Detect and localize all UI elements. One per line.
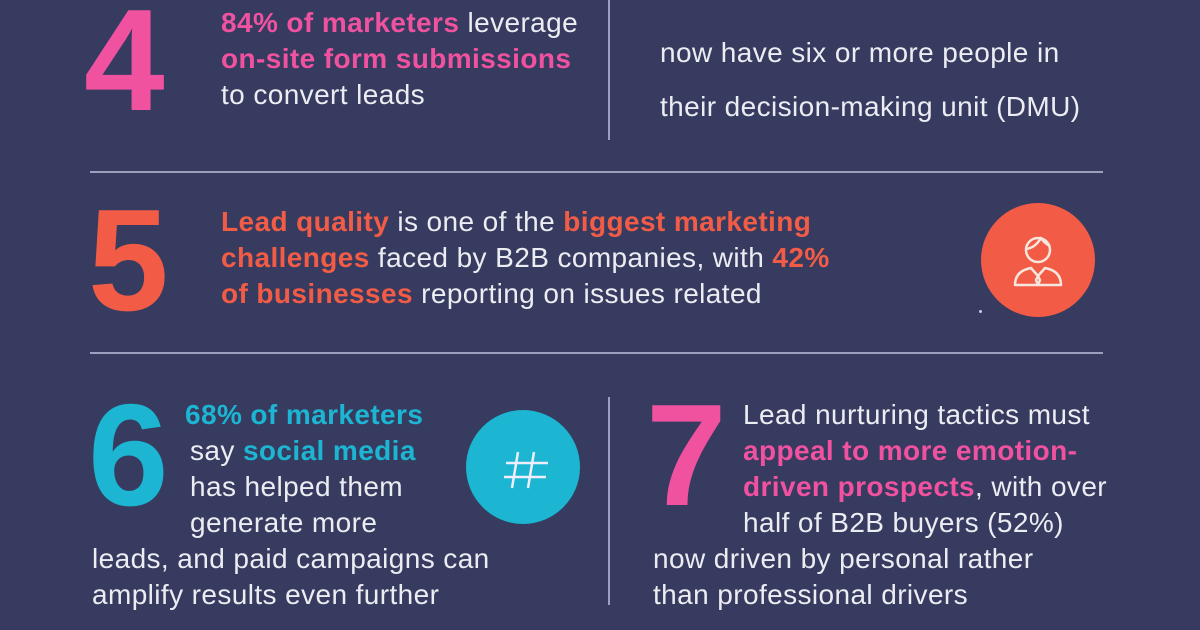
- text block 5: of businesses reporting on issues related: [221, 278, 762, 309]
- text block 7: Lead nurturing tactics must: [743, 399, 1090, 430]
- text block 6: amplify results even further: [92, 579, 439, 610]
- text block 4: [221, 7, 578, 110]
- icon: person: [981, 203, 1095, 317]
- number 7: 7: [646, 374, 727, 536]
- text block 7: [653, 399, 1107, 610]
- text block 4: 84% of marketers leverage: [221, 7, 578, 38]
- number 5: 5: [88, 179, 169, 341]
- number 6: 6: [88, 374, 169, 536]
- text block 7: now driven by personal rather: [653, 543, 1033, 574]
- icon: hashtag: [466, 410, 580, 524]
- text block 6: generate more: [190, 507, 377, 538]
- text block 7: appeal to more emotion-: [743, 435, 1077, 466]
- text block 5: [221, 206, 830, 309]
- text block 6: 68% of marketers: [185, 399, 423, 430]
- text block 5: Lead quality is one of the biggest marketing: [221, 206, 811, 237]
- text block 4: to convert leads: [221, 79, 425, 110]
- text block 6: [92, 399, 490, 610]
- text block: DMU: their decision-making unit (DMU): [660, 91, 1080, 122]
- text block: DMU: now have six or more people in: [660, 37, 1060, 68]
- text block 6: leads, and paid campaigns can: [92, 543, 490, 574]
- text block 5: challenges faced by B2B companies, with 42%: [221, 242, 830, 273]
- text block: DMU: [660, 37, 1080, 122]
- text block 6: has helped them: [190, 471, 403, 502]
- text block 7: than professional drivers: [653, 579, 968, 610]
- text block 7: driven prospects, with over: [743, 471, 1107, 502]
- text block 4: on-site form submissions: [221, 43, 571, 74]
- text block 7: half of B2B buyers (52%): [743, 507, 1064, 538]
- text block 6: say social media: [190, 435, 416, 466]
